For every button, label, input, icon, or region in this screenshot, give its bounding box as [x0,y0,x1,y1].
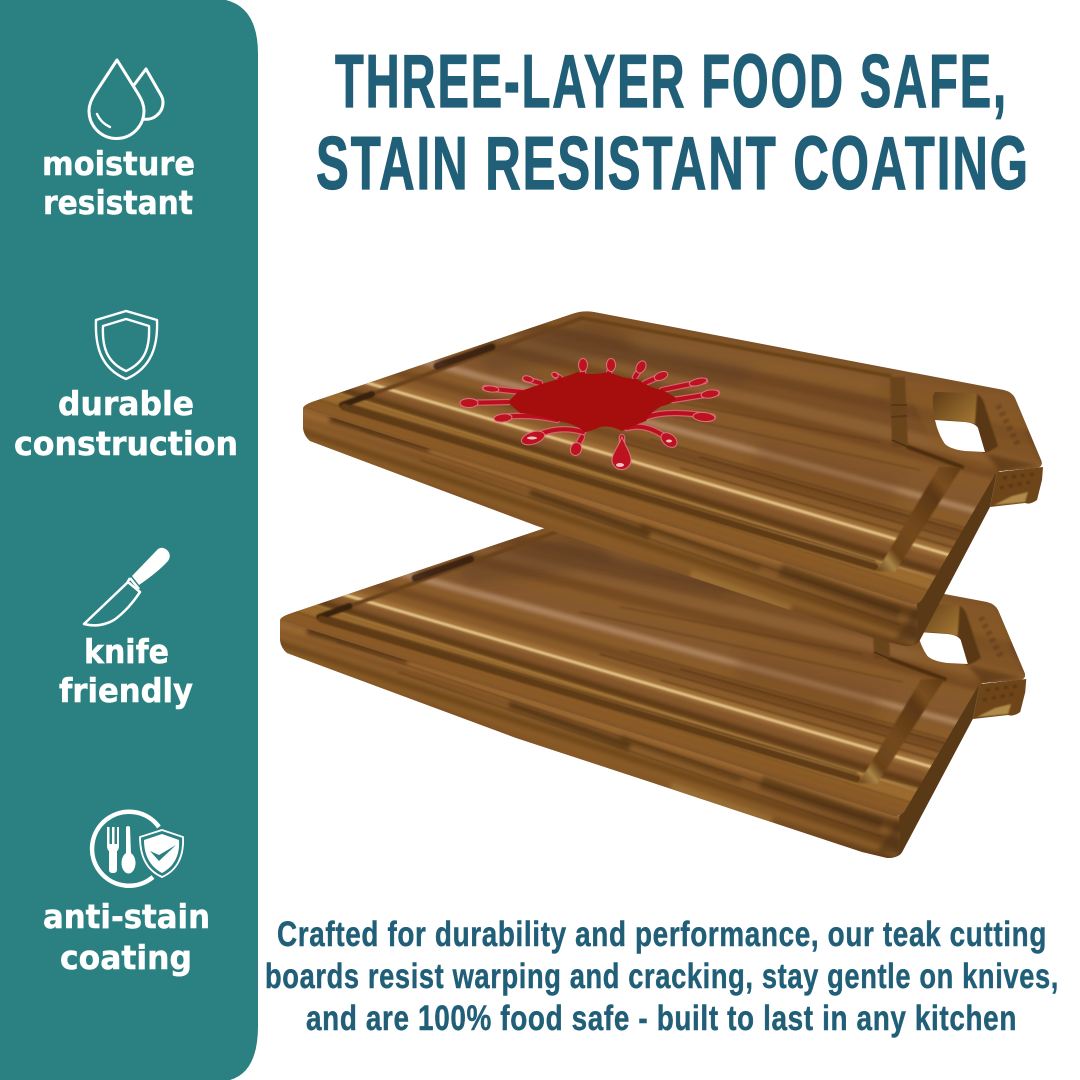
icon: plate with shield [92,812,183,886]
feature: anti-stain coating [43,812,210,977]
feature: moisture resistant [42,60,195,222]
feature: durable construction: durable [58,384,194,423]
feature: moisture resistant: moisture [42,144,195,183]
panel: teal sidebar [0,0,258,1080]
image: upper cutting board [293,300,1064,650]
feature: knife friendly [59,548,193,710]
title [316,39,1030,205]
icon: knife [84,548,170,625]
image: lower cutting board [270,512,1047,862]
feature: knife friendly: friendly [59,671,193,710]
feature: knife friendly: knife [84,632,169,671]
illustration: red stain splat [460,358,719,470]
feature: durable construction [14,311,238,463]
feature: moisture resistant: resistant [43,183,193,222]
icon: water drops [89,60,163,138]
icon: shield [96,311,157,379]
body text [265,915,1059,1038]
feature: anti-stain coating: anti-stain [43,897,210,936]
feature: durable construction: construction [14,424,238,463]
feature: anti-stain coating: coating [60,938,192,977]
